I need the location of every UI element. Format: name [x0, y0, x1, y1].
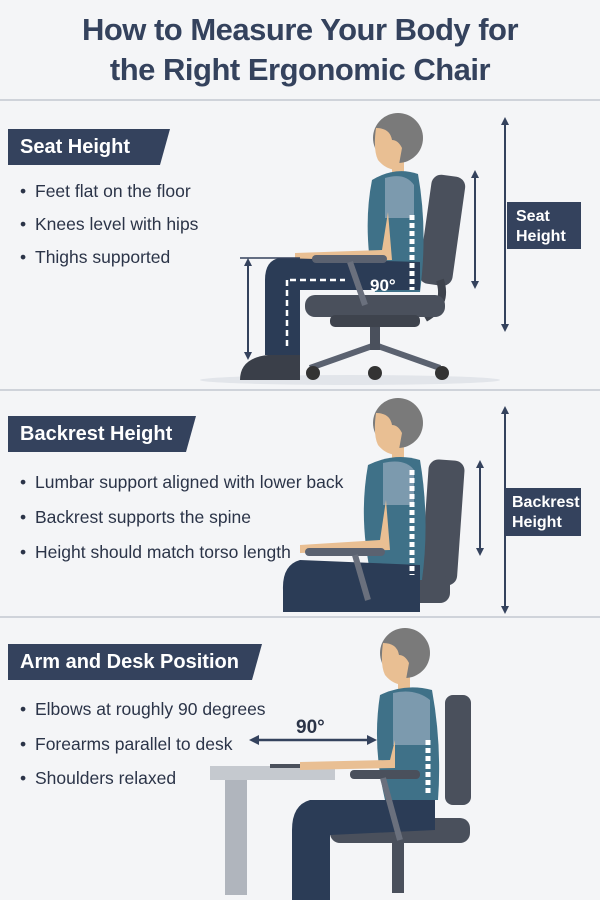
bullets: arm desk [20, 699, 266, 788]
bullets: backrest: Height should match torso length [35, 542, 291, 562]
bullets: backrest [20, 472, 344, 562]
heading: arm and desk [8, 644, 262, 680]
figure: backrest person and chair [283, 398, 581, 612]
bullets: seat height: Feet flat on the floor [35, 181, 191, 201]
heading: seat height [8, 129, 170, 165]
figure: arm and desk person, desk, chair [210, 628, 471, 900]
bullets: seat height [20, 181, 198, 267]
bullets: arm desk: • [20, 734, 26, 754]
figure: seat height person and chair [200, 113, 581, 385]
figure: backrest person and chair: Backrest [512, 494, 580, 511]
bullets: arm desk: Shoulders relaxed [35, 768, 176, 788]
bullets: seat height: Knees level with hips [35, 214, 198, 234]
bullets: seat height: • [20, 247, 26, 267]
figure: backrest person and chair: Height [512, 514, 562, 531]
bullets: seat height: Thighs supported [35, 247, 170, 267]
bullets: backrest: Lumbar support aligned with lower back [35, 472, 343, 492]
bullets: arm desk: Forearms parallel to desk [35, 734, 232, 754]
bullets: seat height: • [20, 181, 26, 201]
bullets: backrest: Backrest supports the spine [35, 507, 251, 527]
figure: seat height person and chair: 90° [370, 276, 396, 295]
bullets: backrest: • [20, 507, 26, 527]
title: the Right Ergonomic Chair [110, 52, 490, 87]
bullets: seat height: • [20, 214, 26, 234]
title [82, 12, 518, 87]
title: How to Measure Your Body for [82, 12, 518, 47]
bullets: arm desk: • [20, 768, 26, 788]
bullets: arm desk: • [20, 699, 26, 719]
heading: seat height: Seat Height [20, 136, 130, 158]
heading: arm and desk: Arm and Desk Position [20, 651, 239, 673]
figure: seat height person and chair: Height [516, 228, 566, 245]
figure: seat height person and chair: Seat [516, 208, 550, 225]
bullets: backrest: • [20, 542, 26, 562]
bullets: backrest: • [20, 472, 26, 492]
heading: backrest height: Backrest Height [20, 423, 172, 445]
heading: backrest height [8, 416, 196, 452]
figure: arm and desk person, desk, chair: 90° [296, 717, 325, 738]
bullets: arm desk: Elbows at roughly 90 degrees [35, 699, 266, 719]
